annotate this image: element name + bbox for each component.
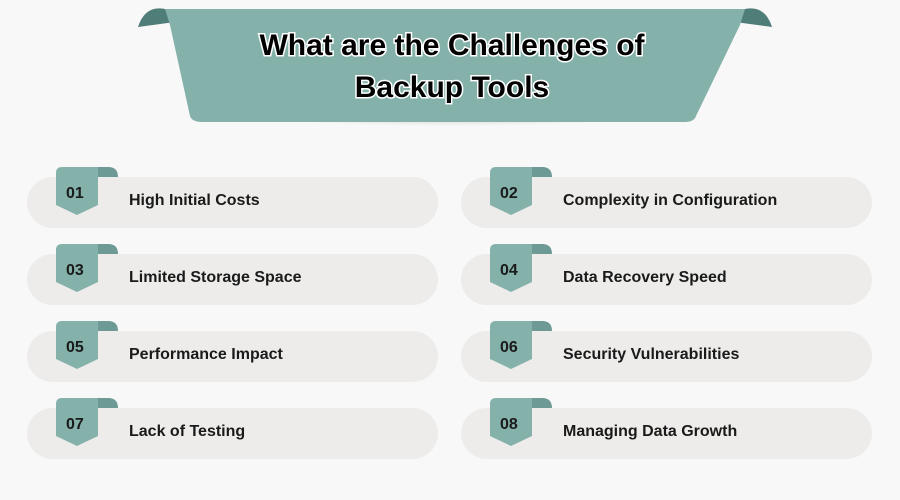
- item 04: Data Recovery Speed: [563, 269, 727, 286]
- item 06: [461, 331, 872, 382]
- item 07: 07: [66, 416, 84, 433]
- item 05: Performance Impact: [129, 346, 283, 363]
- item 03: 03: [66, 262, 84, 279]
- item 03: [27, 254, 438, 305]
- item 04: 04: [500, 262, 518, 279]
- item 07: [27, 408, 438, 459]
- item 02: Complexity in Configuration: [563, 192, 777, 209]
- item 08: 08: [500, 416, 518, 433]
- title banner: Backup Tools: [355, 71, 549, 104]
- item 01: High Initial Costs: [129, 192, 260, 209]
- item 06: Security Vulnerabilities: [563, 346, 739, 363]
- item 02: 02: [500, 185, 518, 202]
- item 05: 05: [66, 339, 84, 356]
- title banner: What are the Challenges of: [259, 29, 646, 62]
- title banner: [138, 8, 772, 124]
- item 03: Limited Storage Space: [129, 269, 302, 286]
- item 06: 06: [500, 339, 518, 356]
- item 05: [27, 331, 438, 382]
- item 01: [27, 177, 438, 228]
- item 01: 01: [66, 185, 84, 202]
- item 08: [461, 408, 872, 459]
- item 07: Lack of Testing: [129, 423, 245, 440]
- item 08: Managing Data Growth: [563, 423, 737, 440]
- item 04: [461, 254, 872, 305]
- item 02: [461, 177, 872, 228]
